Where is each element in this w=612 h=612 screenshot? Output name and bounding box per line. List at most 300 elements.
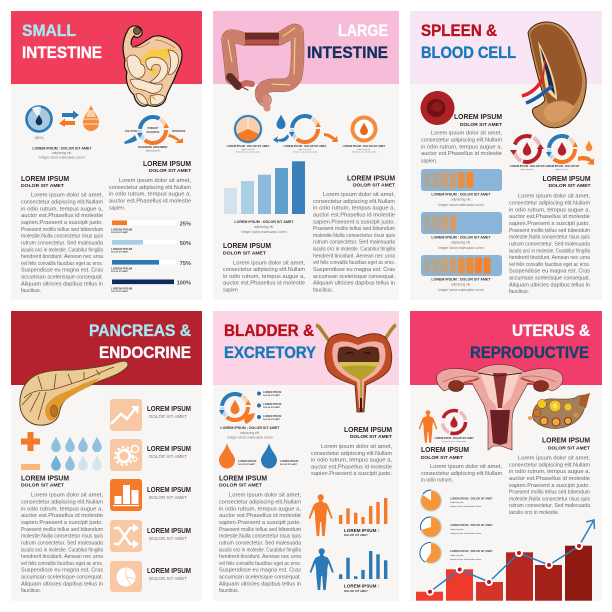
title: small intestine: SMALL xyxy=(22,21,76,40)
icon: blue drop with label: LOREM IPSUM xyxy=(280,459,298,463)
caption: orange chart: LOREM IPSUM : xyxy=(344,528,380,533)
text block: upper right: Lorem ipsum dolor sit amet, xyxy=(321,444,392,450)
text block: left column: hendrerit tincidunt. Aenean nec urna xyxy=(21,254,103,260)
title: uterus and reproductive: REPRODUCTIVE xyxy=(470,343,589,362)
text block: left column: auctor est.Phasellus id molestie xyxy=(21,213,103,219)
text block: right column: consectetur adipiscing elit.Nullam xyxy=(313,199,395,205)
text block: left column: Aliquam ultricies dapibus tellus in xyxy=(21,281,103,287)
text block: left column: Suspendisse eu magna est. Cras xyxy=(21,268,104,274)
captions: icons row: LOREM IPSUM : DOLOR SIT AMET xyxy=(284,144,327,148)
bullet list: LOREM IPSUM xyxy=(263,390,281,394)
illustration: pancreas xyxy=(20,361,128,425)
pie list item one: Integer luctus malesuada Lorem xyxy=(450,505,481,508)
arrow: orange xyxy=(324,133,338,142)
text block: right column: auctor est.Phasellus id molestie xyxy=(509,214,590,220)
text block: right column: accumsan scelerisque consequat. xyxy=(313,274,395,280)
text block: left column: vel felis convallis faucibus eget ac eros. xyxy=(219,561,301,567)
caption: bar chart: LOREM IPSUM : DOLOR SIT AMET xyxy=(234,220,294,224)
text block: left column: LOREM IPSUM xyxy=(223,241,271,250)
caption: gauge: adipiscing elit, xyxy=(52,151,72,155)
text block: left column: Lorem ipsum dolor sit amet, xyxy=(233,260,305,266)
title: large intestine: LARGE xyxy=(338,21,388,40)
text block: left: DOLOR SIT AMET xyxy=(421,455,463,460)
text block: left column: DOLOR SIT AMET xyxy=(21,183,64,188)
text block: left column: in odio rutrum, tempus augue a, xyxy=(223,274,305,280)
text block: left column: DOLOR SIT AMET xyxy=(223,251,266,256)
panel: spleen and blood cell xyxy=(410,11,602,300)
text block: right: LOREM IPSUM xyxy=(542,436,590,445)
caption: bar chart: adipiscing elit, xyxy=(254,225,274,229)
list item: pie icon xyxy=(110,561,191,592)
text block: upper left: LOREM IPSUM xyxy=(454,112,502,121)
cycle diagram: diagnose: DIAGNOSE ARGUMENT xyxy=(138,145,168,149)
text block: left column: Praesent mollis tellus sed bibendum xyxy=(21,527,103,533)
pie list item one: LOREM IPSUM : DOLOR SIT AMET xyxy=(450,496,493,500)
list item: growth icon: DOLOR SIT AMET xyxy=(149,414,187,419)
icon: small orange drop and arrow xyxy=(578,140,594,165)
text block: left column: Praesent mollis tellus sed bibendum xyxy=(219,527,301,533)
text block: left column: LOREM IPSUM xyxy=(219,474,267,483)
list item: shuffle icon xyxy=(110,520,191,552)
pie list item two: LOREM IPSUM : DOLOR SIT AMET xyxy=(450,523,493,527)
cycle diagram: diagnose: DIAGNOSE xyxy=(147,131,160,134)
captions: cycle icons: LOREM IPSUM : DOLOR SIT xyxy=(510,164,545,168)
caption: cycle: Integer luctus malesuada Lorem xyxy=(227,436,273,440)
text block: left column: LOREM IPSUM xyxy=(21,174,69,183)
text block: left column: in odio rutrum, tempus augue a, xyxy=(219,506,301,512)
icon: segmented pie xyxy=(234,115,262,143)
text block: left column: accumsan scelerisque consequat. xyxy=(21,274,103,280)
illustration: bladder xyxy=(316,325,396,412)
pie list item two xyxy=(420,516,493,538)
gauge: four cells xyxy=(421,212,502,250)
title: spleen and blood cell: SPLEEN & xyxy=(421,21,497,40)
title: pancreas and endocrine xyxy=(89,321,191,362)
bullet list: LOREM IPSUM xyxy=(263,402,281,406)
text block: left column: molestie.Nulla consectetur risus quis xyxy=(219,534,301,540)
text block: left column: faucibus. xyxy=(21,288,41,294)
illustration: red blood cell xyxy=(414,85,461,131)
text block: upper right: LOREM IPSUM xyxy=(344,425,392,434)
text block: right column: sapien.Praesent a suscipit justo. xyxy=(313,219,395,225)
list item: bars icon: DOLOR SIT AMET xyxy=(149,495,187,500)
list item: gears icon: LOREM IPSUM xyxy=(147,444,191,453)
caption: blue chart: LOREM IPSUM : xyxy=(344,584,380,589)
caption: orange chart xyxy=(344,528,380,537)
text block: left column: molestie.Nulla consectetur risus quis xyxy=(21,534,103,540)
pie list item three: LOREM IPSUM : DOLOR SIT AMET xyxy=(450,549,493,553)
text block: left column: sapien.Praesent a suscipit justo. xyxy=(21,220,103,226)
text block: right column: in odio rutrum, tempus augue a, xyxy=(509,207,590,213)
text block: right column: DOLOR SIT AMET xyxy=(548,183,591,188)
text block: right xyxy=(509,436,590,516)
text block: right column: auctor est.Phasellus id molestie xyxy=(313,212,395,218)
caption: red cycle: Integer luctus malesuada xyxy=(442,440,467,443)
title: small intestine: INTESTINE xyxy=(22,43,102,62)
caption: gauge xyxy=(32,146,92,160)
icon: blue drop with label: DOLOR SIT AMET xyxy=(280,463,298,466)
illustration: large intestine xyxy=(228,28,298,108)
text block: left column: consectetur adipiscing elit.Nullam xyxy=(21,200,103,206)
text block: right: rutrum consectetur. Sed malesuada xyxy=(509,503,590,509)
text block: left column: vel felis convallis faucibus eget ac eros. xyxy=(21,561,103,567)
text block: left column: vel felis convallis faucibus eget ac eros. xyxy=(21,261,103,267)
illustration: spleen xyxy=(522,22,586,128)
text block: upper right xyxy=(311,425,392,477)
text block: left: in odio rutrum, xyxy=(421,478,453,484)
text block: right column: rutrum consectetur. Sed malesuada xyxy=(509,241,590,247)
text block: left column: LOREM IPSUM xyxy=(21,474,69,483)
text block: left column xyxy=(219,474,302,594)
text block: left column: sapien.Praesent a suscipit justo. xyxy=(219,520,301,526)
text block: right: DOLOR SIT AMET xyxy=(548,446,590,451)
progress bars: 75% xyxy=(180,261,191,267)
bullet list: DOLOR SIT AMET xyxy=(263,394,281,397)
text block: left column: sapien.Praesent a suscipit justo. xyxy=(21,520,103,526)
title: bladder and excretory: EXCRETORY xyxy=(224,343,317,362)
header band: uterus xyxy=(410,311,602,385)
text block: upper left: in odio rutrum, tempus augue a, xyxy=(421,144,502,150)
text block: right column: molestie.Nulla consectetur risus quis xyxy=(509,235,590,241)
text block: left column: Suspendisse eu magna est. Cras xyxy=(21,568,104,574)
header band: small intestine xyxy=(11,11,202,84)
icon: orange drop with label: DOLOR SIT AMET xyxy=(238,463,256,466)
text block: right column: Suspendisse eu magna est. Cras xyxy=(313,267,396,273)
text block: right column: vel felis convallis faucibus eget ac eros. xyxy=(509,262,590,268)
pie list item three: Integer luctus malesuada Lorem xyxy=(450,558,481,561)
panel: uterus and reproductive xyxy=(410,311,602,601)
combo chart: red bars with trend line xyxy=(416,520,594,601)
text block: right column: accumsan scelerisque consequat. xyxy=(509,276,590,282)
text block: right column: vel felis convallis faucibus eget ac eros. xyxy=(313,260,395,266)
cycle diagram: diagnose: adipiscing elit, xyxy=(145,150,161,152)
icon: red cycle with drop xyxy=(509,131,545,167)
text block: upper left: DOLOR SIT AMET xyxy=(460,122,502,127)
text block: right: Lorem ipsum dolor sit amet, xyxy=(518,456,590,462)
list item: gears icon: DOLOR SIT AMET xyxy=(149,454,187,459)
caption: red cycle: LOREM IPSUM : DOLOR SIT AMET xyxy=(434,437,474,440)
text block: left column: in odio rutrum, tempus augue a, xyxy=(21,506,103,512)
bullet list: LOREM IPSUM xyxy=(263,414,281,418)
text block: left column: consectetur adipiscing elit.Nullam xyxy=(219,500,301,506)
text block: left column: accumsan scelerisque consequat. xyxy=(21,574,103,580)
gauge: eight cells: Integer luctus malesuada Lorem xyxy=(438,288,484,292)
captions: cycle icons: adipiscing elit, xyxy=(555,168,569,171)
pie list item one: adipiscing elit, xyxy=(450,501,464,504)
text block: left column: hendrerit tincidunt. Aenean nec urna xyxy=(21,554,103,560)
icon: orange drop xyxy=(83,105,99,131)
text block: right column: Suspendisse eu magna est. Cras xyxy=(509,269,591,275)
title: small intestine xyxy=(22,21,102,62)
cycle diagram: diagnose: SOLUTION xyxy=(125,130,138,133)
caption: cycle xyxy=(220,426,280,440)
caption: bar chart: Integer luctus malesuada Lorem xyxy=(241,230,287,234)
caption: blue chart: DOLOR SIT AMET xyxy=(344,589,368,593)
list item: pie icon: LOREM IPSUM xyxy=(147,566,191,575)
text block: right column: DOLOR SIT AMET xyxy=(149,168,191,173)
text block: right column: Praesent mollis tellus sed bibendum xyxy=(313,226,395,232)
icon: minus xyxy=(21,464,40,470)
text block: right column: molestie.Nulla consectetur risus quis xyxy=(313,233,395,239)
gauge: six cells: LOREM IPSUM : DOLOR SIT AMET xyxy=(431,192,491,196)
text block: right column: consectetur adipiscing elit.Nullam xyxy=(109,185,191,191)
pie list item two: adipiscing elit, xyxy=(450,528,464,531)
bullet list xyxy=(257,390,281,421)
list item: shuffle icon: LOREM IPSUM xyxy=(147,526,191,535)
text block: left column: auctor est.Phasellus id molestie xyxy=(223,281,305,287)
text block: right column: hendrerit tincidunt. Aenean nec urna xyxy=(313,253,395,259)
text block: left column: molestie.Nulla consectetur risus quis xyxy=(21,234,103,240)
illustration: uterus xyxy=(437,364,563,450)
caption: gauge: LOREM IPSUM : DOLOR SIT AMET xyxy=(32,146,92,150)
text block: right column: LOREM IPSUM xyxy=(143,159,191,168)
list item: bars icon xyxy=(110,479,191,511)
text block: left column: rutrum consectetur. Sed malesuada xyxy=(21,540,103,546)
text block: left column xyxy=(223,241,305,294)
text block: left column: Aliquam ultricies dapibus tellus in xyxy=(21,581,103,587)
text block: left column: sapien xyxy=(223,288,238,294)
title: spleen and blood cell: BLOOD CELL xyxy=(421,43,516,62)
text block: right column: rutrum consectetur. Sed malesuada xyxy=(313,240,395,246)
title: pancreas and endocrine: PANCREAS & xyxy=(89,321,191,340)
text block: upper left xyxy=(421,112,502,164)
text block: left column: Lorem ipsum dolor sit amet, xyxy=(31,193,103,199)
text block: left: LOREM IPSUM xyxy=(421,445,469,454)
list item: growth icon xyxy=(110,399,191,431)
progress bars xyxy=(111,220,191,293)
icon: orange human figure xyxy=(309,494,333,536)
text block: left column: hendrerit tincidunt. Aenean nec urna xyxy=(219,554,301,560)
text block: left column: consectetur adipiscing elit.Nullam xyxy=(21,500,103,506)
panel: large intestine xyxy=(213,11,399,300)
bar chart: blue xyxy=(339,551,387,579)
text block: right column: Praesent mollis tellus sed bibendum xyxy=(509,228,590,234)
text block: left column xyxy=(21,174,104,294)
caption: orange chart: DOLOR SIT AMET xyxy=(344,533,368,537)
title: uterus and reproductive xyxy=(470,321,590,362)
title: large intestine: INTESTINE xyxy=(307,43,388,62)
icon: plus xyxy=(21,432,40,451)
icon: orange drop with label: LOREM IPSUM xyxy=(238,459,256,463)
progress bars: DOLOR SIT AMET xyxy=(111,231,129,234)
title: pancreas and endocrine: ENDOCRINE xyxy=(99,343,191,362)
captions: icons row: Integer luctus malesuada xyxy=(352,150,377,154)
captions: icons row: adipiscing elit, xyxy=(357,148,371,151)
text block: left column: Aliquam ultricies dapibus tellus in xyxy=(219,581,301,587)
icon: orange drop with label xyxy=(219,443,256,469)
illustration: ovary xyxy=(528,393,590,429)
bullet list: DOLOR SIT AMET xyxy=(263,406,281,409)
cycle diagram xyxy=(287,111,323,147)
icon: red cycle with drop xyxy=(438,406,470,438)
text block: right column: iaculis orci in molestie. Curabitur fringilla xyxy=(509,248,590,254)
text block: upper left: sapien. xyxy=(421,158,437,164)
icon: orange human figure xyxy=(419,410,437,443)
header band: large intestine xyxy=(213,11,399,84)
title: bladder and excretory: BLADDER & xyxy=(224,321,314,340)
text block: right: consectetur adipiscing elit.Nullam xyxy=(509,462,590,468)
caption: gauge: Integer luctus malesuada Lorem xyxy=(39,156,85,160)
bullet list: DOLOR SIT AMET xyxy=(263,418,281,421)
drops grid xyxy=(51,436,102,471)
progress bars: LOREM IPSUM xyxy=(111,228,133,232)
list item: bars icon: LOREM IPSUM xyxy=(147,485,191,494)
list item: growth icon: LOREM IPSUM xyxy=(147,404,191,413)
text block: upper left: Lorem ipsum dolor sit amet, xyxy=(431,131,502,137)
header band: pancreas xyxy=(11,311,202,385)
list item: shuffle icon: DOLOR SIT AMET xyxy=(149,536,187,541)
icon: blue drop and arrow xyxy=(273,114,289,143)
text block: left column: auctor est.Phasellus id molestie xyxy=(21,513,103,519)
panel: bladder and excretory xyxy=(213,311,399,601)
pie list item three: adipiscing elit, xyxy=(450,554,464,557)
icon: blue orange cycle with drop xyxy=(544,131,580,167)
captions: icons row: adipiscing elit, xyxy=(298,148,312,151)
panel: small intestine xyxy=(11,11,202,300)
caption: blue chart xyxy=(344,584,380,593)
text block: right column: hendrerit tincidunt. Aenean nec urna xyxy=(509,255,590,261)
text block: right column: consectetur adipiscing elit.Nullam xyxy=(509,200,590,206)
title: spleen and blood cell xyxy=(421,21,516,62)
text block: left column: Lorem ipsum dolor sit amet, xyxy=(31,493,103,499)
captions: icons row: adipiscing elit, xyxy=(241,148,255,151)
icon: orange ring drop xyxy=(352,118,376,140)
progress bars: DOLOR SIT AMET xyxy=(111,270,129,273)
text block: right column: LOREM IPSUM xyxy=(347,174,395,183)
text block: right column: sapien. xyxy=(109,205,125,211)
text block: right column: auctor est.Phasellus id molestie xyxy=(109,198,191,204)
caption: bar chart xyxy=(234,220,294,234)
bar chart: blue gradient xyxy=(224,161,305,214)
text block: right column: LOREM IPSUM xyxy=(542,174,590,183)
cycle diagram: diagnose: PRIMARY xyxy=(148,127,159,130)
text block: right: Praesent mollis tellus sed bibendum xyxy=(509,490,590,496)
captions: cycle icons: adipiscing elit, xyxy=(520,168,534,171)
text block: upper right: in odio rutrum, tempus augue a, xyxy=(311,458,392,464)
text block: upper right: DOLOR SIT AMET xyxy=(350,434,392,439)
text block: right column: sapien.Praesent a suscipit justo. xyxy=(509,221,590,227)
text block: right column: faucibus. xyxy=(509,289,529,295)
captions: cycle icons: LOREM IPSUM : DOLOR SIT xyxy=(545,164,580,168)
title: bladder and excretory xyxy=(224,321,317,362)
header band: spleen xyxy=(410,11,602,84)
caption: cycle: adipiscing elit, xyxy=(240,431,260,435)
icon: blue human figure xyxy=(310,548,334,590)
cycle diagram: diagnose: RESPONSE xyxy=(172,130,186,133)
title: uterus and reproductive: UTERUS & xyxy=(512,321,590,340)
list item: pie icon: DOLOR SIT AMET xyxy=(149,576,187,581)
text block: left column: iaculis orci in molestie. Curabitur fringilla xyxy=(219,547,301,553)
text block: right: iaculis orci in molestie. xyxy=(509,510,559,516)
captions: icons row xyxy=(227,144,386,154)
text block: left column: DOLOR SIT AMET xyxy=(219,483,262,488)
progress bars: LOREM IPSUM xyxy=(111,266,133,270)
header band: bladder xyxy=(213,311,399,385)
text block: left column: Suspendisse eu magna est. Cras xyxy=(219,568,302,574)
text block: right column: Lorem ipsum dolor sit amet, xyxy=(119,178,191,184)
text block: left column: rutrum consectetur. Sed malesuada xyxy=(21,240,103,246)
text block: upper right: consectetur adipiscing elit.Nullam xyxy=(311,451,392,457)
panel: pancreas and endocrine xyxy=(11,311,202,601)
icon: percentage gauge xyxy=(26,106,52,140)
pie list item one xyxy=(420,490,493,511)
pie list item three xyxy=(420,542,493,564)
gauge: six cells: adipiscing elit, xyxy=(451,198,471,202)
gauge: four cells: Integer luctus malesuada Lorem xyxy=(438,246,484,250)
text block: left column: iaculis orci in molestie. Curabitur fringilla xyxy=(21,547,103,553)
progress bars: LOREM IPSUM xyxy=(111,286,133,290)
pie list item two: Integer luctus malesuada Lorem xyxy=(450,532,481,535)
caption: red cycle xyxy=(434,437,474,443)
text block: left column: faucibus. xyxy=(21,588,41,594)
progress bars: 100% xyxy=(177,280,191,286)
text block: left xyxy=(421,445,502,484)
text block: right: in odio rutrum, tempus augue a, xyxy=(509,469,590,475)
progress bars: 25% xyxy=(180,222,191,228)
icon: percentage gauge: (88%) xyxy=(34,136,44,140)
progress bars: DOLOR SIT AMET xyxy=(111,250,129,254)
captions: cycle icons xyxy=(510,164,580,171)
text block: left column: faucibus. xyxy=(219,588,239,594)
gauge: four cells: LOREM IPSUM : DOLOR SIT AMET xyxy=(431,236,491,240)
gauge: eight cells: adipiscing elit, xyxy=(451,282,471,286)
captions: icons row: LOREM IPSUM : DOLOR SIT AMET xyxy=(227,144,270,148)
text block: left column xyxy=(21,474,104,594)
text block: right column: Aliquam ultricies dapibus tellus in xyxy=(313,281,395,287)
text block: right column: Aliquam ultricies dapibus tellus in xyxy=(509,282,590,288)
text block: right column: in odio rutrum, tempus augue a, xyxy=(109,192,191,198)
text block: right column: DOLOR SIT AMET xyxy=(353,183,395,188)
text block: right column: in odio rutrum, tempus augue a, xyxy=(313,206,395,212)
cycle diagram with drop xyxy=(217,389,255,425)
progress bars: DOLOR SIT AMET xyxy=(111,290,129,293)
illustration: small intestine xyxy=(123,26,182,106)
title: large intestine xyxy=(307,21,388,62)
text block: right column xyxy=(109,159,191,211)
text block: right column: faucibus. xyxy=(313,288,333,294)
progress bars: 50% xyxy=(180,241,191,247)
text block: left column: accumsan scelerisque consequat. xyxy=(219,574,301,580)
text block: right column: iaculis orci in molestie. Curabitur fringilla xyxy=(313,247,395,253)
icon: blue drop with label xyxy=(261,443,298,469)
text block: upper left: auctor est.Phasellus id molestie xyxy=(421,151,502,157)
gauge: four cells: adipiscing elit, xyxy=(451,240,471,244)
text block: right: molestie.Nulla consectetur risus quis xyxy=(509,496,590,502)
text block: upper right: auctor est.Phasellus id molestie xyxy=(311,464,392,470)
text block: right: auctor est.Phasellus id molestie xyxy=(509,476,590,482)
captions: icons row: Integer luctus malesuada xyxy=(236,150,261,154)
arrows: exchange xyxy=(59,110,79,127)
text block: left column: in odio rutrum, tempus augue a, xyxy=(21,206,103,212)
cycle diagram: diagnose xyxy=(124,112,186,152)
gauge: eight cells: LOREM IPSUM : DOLOR SIT AMET xyxy=(431,278,491,282)
text block: right column xyxy=(313,174,396,294)
text block: right column: Lorem ipsum dolor sit amet, xyxy=(518,194,590,200)
text block: upper right: sapien.Praesent a suscipit justo. xyxy=(311,471,392,477)
text block: left: Lorem ipsum dolor sit amet, xyxy=(430,464,502,470)
gauge: eight cells xyxy=(421,255,502,292)
text block: upper left: consectetur adipiscing elit.Nullam xyxy=(421,138,502,144)
caption: cycle: LOREM IPSUM : DOLOR SIT AMET xyxy=(220,426,280,430)
text block: right: sapien.Praesent a suscipit justo. xyxy=(509,483,590,489)
text block: left column: consectetur adipiscing elit.Nullam xyxy=(223,267,305,273)
text block: left column: auctor est.Phasellus id molestie xyxy=(219,513,301,519)
captions: icons row: LOREM IPSUM : DOLOR SIT AMET xyxy=(343,144,386,148)
text block: left column: iaculis orci in molestie. Curabitur fringilla xyxy=(21,247,103,253)
text block: left column: rutrum consectetur. Sed malesuada xyxy=(219,540,301,546)
text block: left column: DOLOR SIT AMET xyxy=(21,483,64,488)
gauge: six cells: Integer luctus malesuada Lorem xyxy=(438,203,484,207)
